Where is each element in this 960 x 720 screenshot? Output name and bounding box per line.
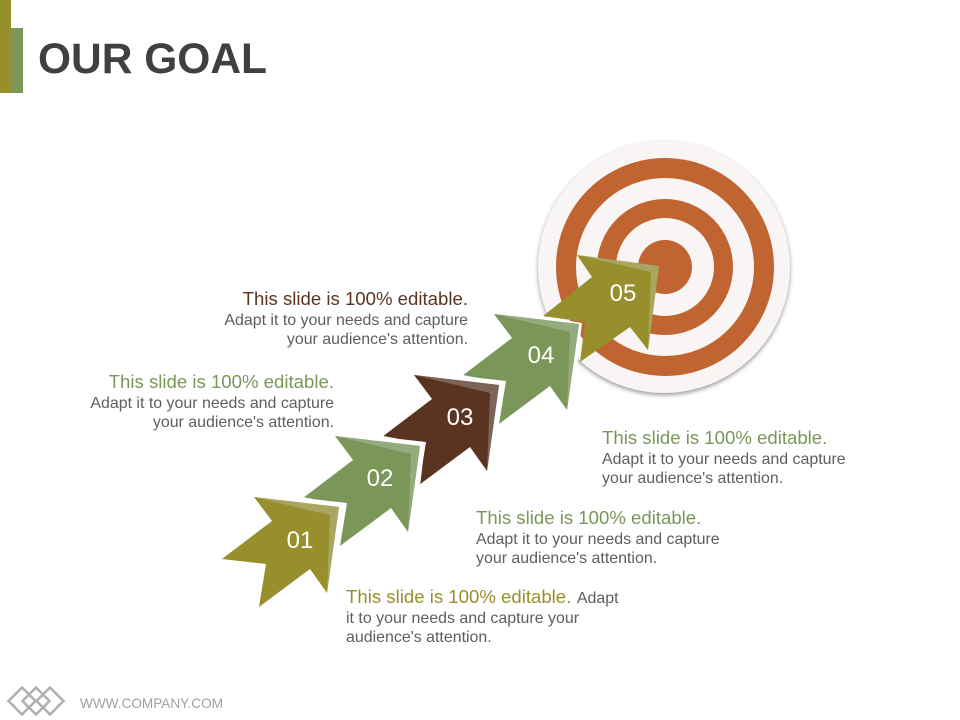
text block 05 [602, 427, 846, 487]
text block 02 [476, 507, 720, 567]
text block 04 [224, 288, 468, 348]
text block 03: Adapt it to your needs and capture [90, 395, 334, 412]
arrow 01 [222, 490, 344, 607]
arrow 03: 03 [447, 404, 473, 431]
arrow 02 [303, 428, 425, 546]
header accent bar [0, 0, 23, 93]
arrow 04: 04 [528, 342, 554, 369]
text block 03 [90, 371, 334, 431]
text block 01: audience's attention. [346, 629, 492, 646]
text block 05: This slide is 100% editable. [602, 427, 827, 448]
text block 04: Adapt it to your needs and capture [224, 312, 468, 329]
arrow 01: 01 [287, 527, 313, 554]
text block 02: Adapt it to your needs and capture [476, 531, 720, 548]
text block 05: Adapt it to your needs and capture [602, 451, 846, 468]
icon: footer logo diamonds [8, 688, 64, 714]
arrow 02: 02 [367, 465, 393, 492]
footer url: WWW.COMPANY.COM [80, 696, 223, 711]
text block 03: your audience's attention. [153, 414, 334, 431]
arrow 05 [543, 255, 659, 362]
target icon [538, 141, 790, 395]
text block 02: This slide is 100% editable. [476, 507, 701, 528]
text block 04: your audience's attention. [287, 331, 468, 348]
arrow 05: 05 [610, 280, 636, 307]
text block 04: This slide is 100% editable. [243, 288, 468, 309]
text block 03: This slide is 100% editable. [109, 371, 334, 392]
text block 01: it to your needs and capture your [346, 610, 580, 627]
text block 01 [346, 586, 619, 646]
arrow 03 [382, 368, 504, 485]
text block 05: your audience's attention. [602, 470, 783, 487]
title: OUR GOAL [38, 36, 267, 83]
text block 01: This slide is 100% editable. Adapt [346, 586, 619, 607]
text block 02: your audience's attention. [476, 550, 657, 567]
arrow 04 [462, 310, 582, 424]
